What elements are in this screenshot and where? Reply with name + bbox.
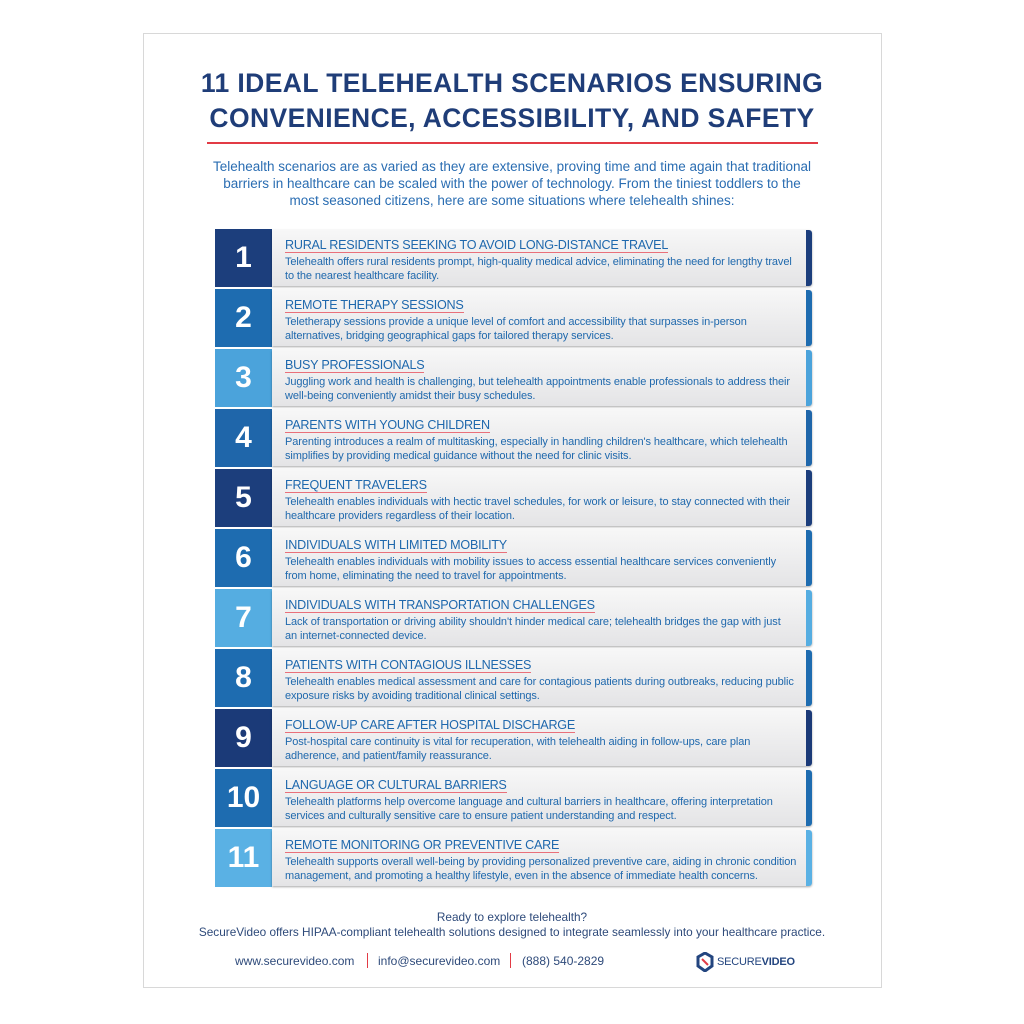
title: CONVENIENCE, ACCESSIBILITY, AND SAFETY	[209, 103, 815, 133]
row 3	[215, 349, 814, 408]
footer contact: (888) 540-2829	[522, 954, 604, 968]
title: 11 IDEAL TELEHEALTH SCENARIOS ENSURING	[201, 68, 823, 98]
row 2: 2	[235, 301, 252, 334]
row 2: alternatives, bridging geographical gaps for tailored therapy services.	[285, 330, 614, 342]
row 4: simplifies by providing medical guidance without the need for clinic visits.	[285, 450, 631, 462]
row 2: Teletherapy sessions provide a unique level of comfort and accessibility that surpasses in-person	[285, 316, 747, 328]
intro text: Telehealth scenarios are as varied as they are extensive, proving time and time again that traditional	[213, 159, 811, 174]
row 5: FREQUENT TRAVELERS	[285, 478, 427, 492]
scenario list	[215, 229, 814, 888]
footer contact	[235, 953, 604, 968]
row 8: exposure risks by avoiding traditional clinical settings.	[285, 690, 540, 702]
row 11	[215, 829, 814, 888]
logo: SECUREVIDEO	[717, 956, 795, 968]
row 5: healthcare providers regardless of their location.	[285, 510, 515, 522]
row 10: Telehealth platforms help overcome language and cultural barriers in healthcare, offering interpretation	[285, 796, 773, 808]
row 9: 9	[235, 721, 252, 754]
row 6: from home, eliminating the need to travel for appointments.	[285, 570, 566, 582]
row 8: 8	[235, 661, 252, 694]
row 9: Post-hospital care continuity is vital for recuperation, with telehealth aiding in follow-ups, care plan	[285, 736, 750, 748]
row 2	[215, 289, 814, 348]
row 5	[215, 469, 814, 528]
row 6: Telehealth enables individuals with mobility issues to access essential healthcare services conveniently	[285, 556, 776, 568]
row 6	[215, 529, 814, 588]
row 10: 10	[227, 781, 260, 814]
row 3: BUSY PROFESSIONALS	[285, 358, 424, 372]
row 11: management, and promoting a healthy lifestyle, even in the absence of immediate health concerns.	[285, 870, 758, 882]
call to action	[199, 910, 825, 939]
row 7: INDIVIDUALS WITH TRANSPORTATION CHALLENGES	[285, 598, 595, 612]
row 7: 7	[235, 601, 252, 634]
row 1: RURAL RESIDENTS SEEKING TO AVOID LONG-DISTANCE TRAVEL	[285, 238, 668, 252]
row 8: PATIENTS WITH CONTAGIOUS ILLNESSES	[285, 658, 531, 672]
row 8: Telehealth enables medical assessment and care for contagious patients during outbreaks, reducing public	[285, 676, 794, 688]
row 6: 6	[235, 541, 252, 574]
row 5: 5	[235, 481, 252, 514]
row 4	[215, 409, 814, 468]
page frame	[143, 33, 882, 988]
row 10	[215, 769, 814, 828]
row 7: Lack of transportation or driving ability shouldn't hinder medical care; telehealth bridges the gap with just	[285, 616, 781, 628]
row 10: services and culturally sensitive care to ensure patient understanding and respect.	[285, 810, 677, 822]
footer contact: info@securevideo.com	[378, 954, 500, 968]
row 7: an internet-connected device.	[285, 630, 426, 642]
row 5: Telehealth enables individuals with hectic travel schedules, for work or leisure, to stay connected with their	[285, 496, 790, 508]
row 9: adherence, and patient/family reassurance.	[285, 750, 492, 762]
row 1: Telehealth offers rural residents prompt, high-quality medical advice, eliminating the need for lengthy travel	[285, 256, 792, 268]
title	[201, 68, 823, 133]
intro text	[213, 159, 811, 208]
row 11: 11	[228, 841, 259, 874]
intro text: most seasoned citizens, here are some situations where telehealth shines:	[290, 193, 734, 208]
row 3: Juggling work and health is challenging, but telehealth appointments enable professionals to address their	[285, 376, 790, 388]
row 1: 1	[235, 241, 252, 274]
row 1	[215, 229, 814, 288]
row 3: 3	[235, 361, 252, 394]
call to action: SecureVideo offers HIPAA-compliant telehealth solutions designed to integrate seamlessly into your healthcare practice.	[199, 925, 825, 939]
row 4: 4	[235, 421, 252, 454]
row 11: REMOTE MONITORING OR PREVENTIVE CARE	[285, 838, 559, 852]
row 1: to the nearest healthcare facility.	[285, 270, 439, 282]
row 7	[215, 589, 814, 648]
row 4: PARENTS WITH YOUNG CHILDREN	[285, 418, 490, 432]
row 4: Parenting introduces a realm of multitasking, especially in handling children's healthcare, which telehealth	[285, 436, 787, 448]
intro text: barriers in healthcare can be scaled with the power of technology. From the tiniest toddlers to the	[223, 176, 801, 191]
icon: shield	[696, 952, 714, 972]
row 2: REMOTE THERAPY SESSIONS	[285, 298, 464, 312]
footer contact: www.securevideo.com	[235, 954, 354, 968]
row 6: INDIVIDUALS WITH LIMITED MOBILITY	[285, 538, 507, 552]
row 9	[215, 709, 814, 768]
row 3: well-being conveniently amidst their busy schedules.	[285, 390, 535, 402]
logo	[696, 952, 795, 972]
row 8	[215, 649, 814, 708]
row 10: LANGUAGE OR CULTURAL BARRIERS	[285, 778, 507, 792]
row 11: Telehealth supports overall well-being by providing personalized preventive care, aiding in chronic condition	[285, 856, 796, 868]
call to action: Ready to explore telehealth?	[437, 910, 587, 924]
row 9: FOLLOW-UP CARE AFTER HOSPITAL DISCHARGE	[285, 718, 575, 732]
